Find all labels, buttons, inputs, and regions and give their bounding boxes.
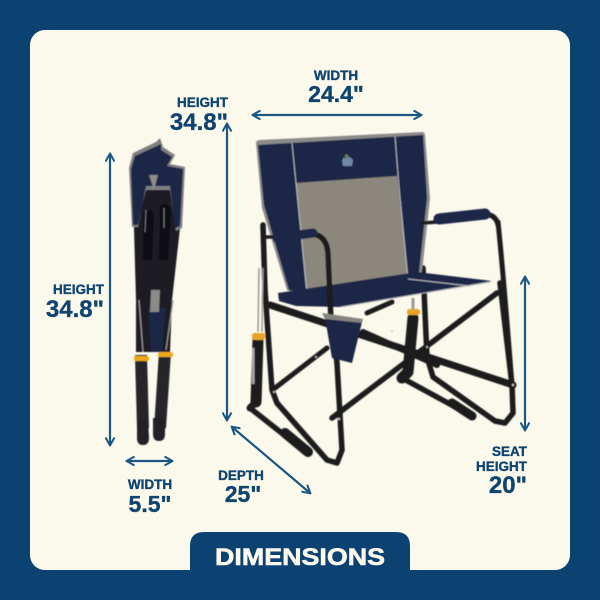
arrow: folded width [127,460,172,462]
folded chair dark core [134,170,180,352]
chair back [256,132,430,296]
label: folded width [128,477,172,517]
rear frame [363,268,513,423]
frame rivets [273,330,514,420]
label: seat height [476,444,528,499]
arrow: chair width [253,114,421,116]
right yellow collar [407,309,420,315]
label: folded height: HEIGHT [53,282,105,297]
label: folded width: 5.5" [129,491,171,517]
folded chair outer fabric [129,138,185,231]
label: depth: DEPTH [218,468,264,483]
label: folded width: WIDTH [128,477,172,492]
arrow: seat height [524,277,526,430]
tab: dimensions heading: DIMENSIONS [215,544,385,571]
label: seat height: SEAT [492,444,528,459]
left shock rod [258,268,263,332]
tab: dimensions heading [190,532,410,572]
arrow: chair height [226,124,228,420]
left yellow collar [252,333,265,340]
label: chair height: HEIGHT [177,95,229,110]
label: folded height: 34.8" [46,296,104,323]
arrow: chair depth [232,427,310,493]
yellow collars [134,356,149,361]
label: chair height: 34.8" [170,109,228,136]
label: chair width: 24.4" [308,81,364,107]
label: seat height: 20" [489,472,527,499]
label: chair height [170,95,229,136]
label: seat height: HEIGHT [476,459,528,474]
label: depth: 25" [225,481,261,507]
folded chair legs [139,300,173,428]
icon: folded chair [129,138,185,445]
seat [278,272,492,307]
folded chair centre fabric [148,308,166,352]
folded chair feet [137,420,149,445]
folded chair hinges [143,204,171,260]
right shock rod [412,298,414,310]
label: chair width [308,68,364,107]
cup holder [322,313,363,363]
label: folded height [46,282,105,323]
right armrest [439,214,485,219]
left arm stub [264,235,273,239]
piping [292,136,408,293]
icon: rocking chair [250,132,514,463]
arrow: folded height [109,154,111,445]
mesh panel [296,176,408,290]
label: depth [218,468,264,507]
front frame [250,214,513,463]
left armrest [277,233,313,238]
left shock label [252,348,254,384]
chair logo [342,154,353,166]
label: chair width: WIDTH [314,68,358,83]
